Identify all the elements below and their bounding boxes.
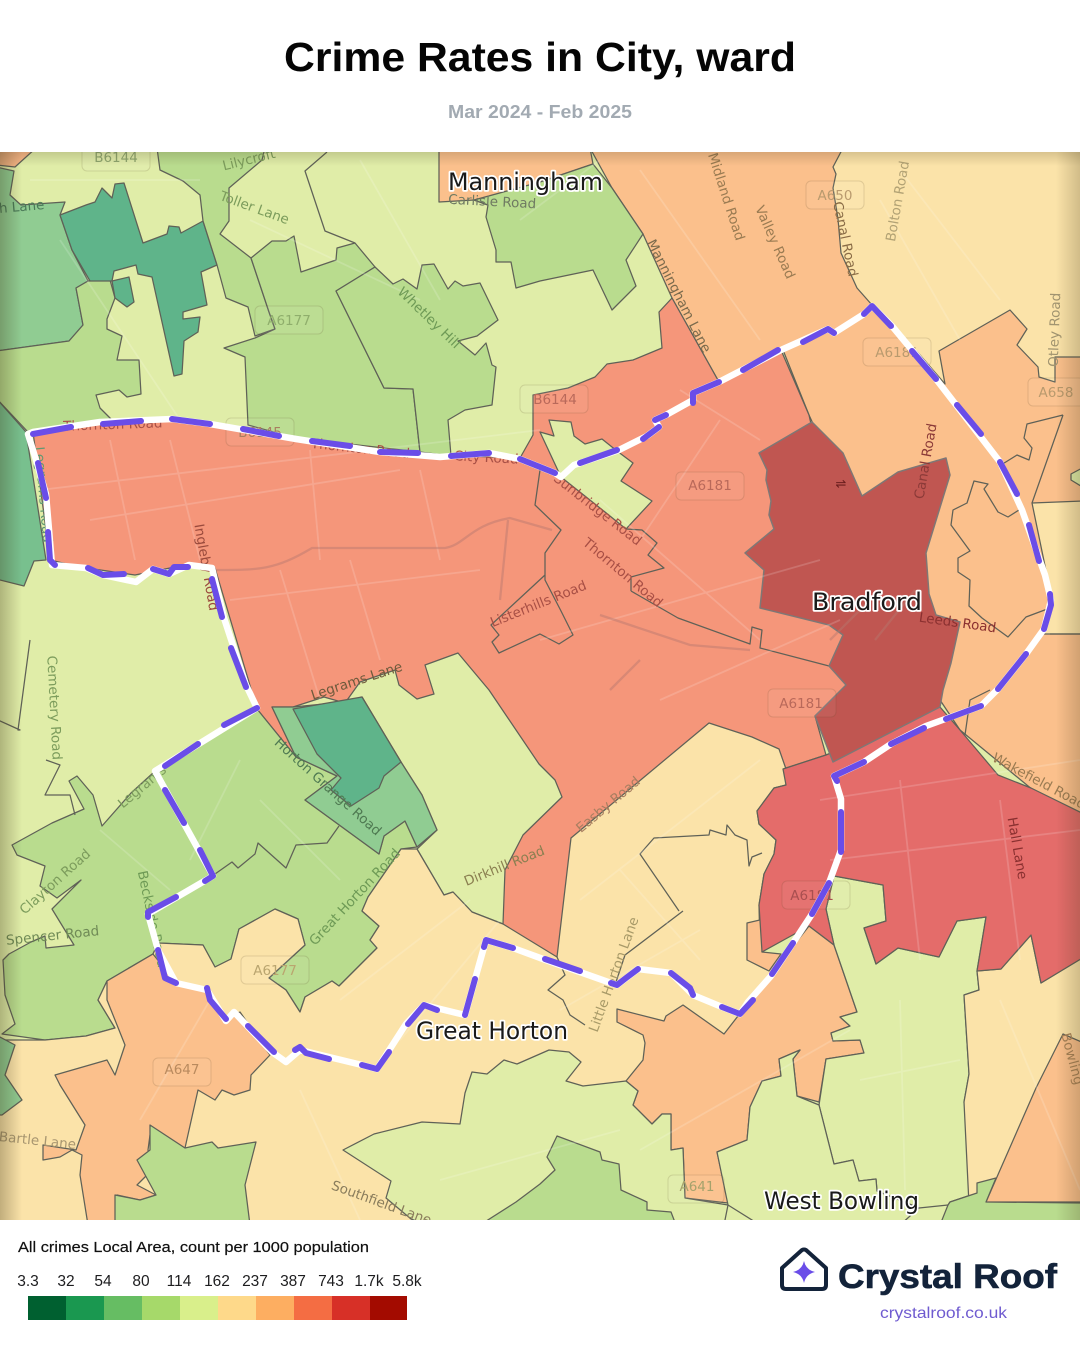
road name labels: Easby Road xyxy=(573,774,644,836)
road name labels: Bartle Lane xyxy=(0,1129,77,1153)
road name labels: Legrams Lane xyxy=(309,659,404,704)
legend scale values: 114 xyxy=(167,1273,192,1290)
yellow interior boundaries xyxy=(548,825,762,1025)
region: dark red Bradford centre xyxy=(745,422,960,762)
road name labels: Beckside Road xyxy=(134,869,170,969)
railway lines xyxy=(215,518,915,690)
road name labels: A650 xyxy=(817,188,853,204)
region: red Hall Lane xyxy=(757,707,1080,983)
road name labels: A647 xyxy=(164,1062,200,1078)
road name labels: Clayton Road xyxy=(17,846,94,918)
road name labels: Southfield Lane xyxy=(329,1178,434,1229)
road name labels: A6177 xyxy=(253,963,297,979)
region: south-east green xyxy=(940,1178,1080,1225)
region: central pale green xyxy=(345,653,562,924)
region: west green xyxy=(0,167,88,351)
road name labels: Little Horton Lane xyxy=(586,915,642,1034)
road name labels: Legrams xyxy=(115,762,170,812)
logo: Crystal Roof xyxy=(782,1250,1058,1322)
place label: West Bowling: West Bowling xyxy=(764,1187,919,1215)
region: salmon central area xyxy=(33,298,860,960)
region: south-east pale green xyxy=(819,876,986,1208)
salmon interior boundaries xyxy=(491,470,829,666)
road name labels: B6144 xyxy=(94,150,138,166)
region: south-west green lobe xyxy=(115,1125,256,1225)
region: top-left corner orange xyxy=(0,152,32,168)
region: south-centre green xyxy=(480,1136,676,1225)
road shields xyxy=(82,143,1080,1203)
outlines inside south-west green xyxy=(0,640,339,874)
place label: Great Horton: Great Horton xyxy=(416,1017,568,1045)
region: west light green xyxy=(0,280,141,432)
region: north-east orange xyxy=(590,148,1080,832)
region: south yellow xyxy=(0,723,800,1225)
region: Manningham green xyxy=(474,164,643,310)
road name labels: A6181 xyxy=(688,478,732,494)
road name labels: A6181 xyxy=(779,696,823,712)
region: south-centre pale green xyxy=(343,1050,728,1225)
legend scale values: 54 xyxy=(94,1273,112,1290)
road name labels: B6145 xyxy=(238,425,282,441)
title: Crime Rates in City, ward xyxy=(284,34,796,80)
east orange patch outline xyxy=(951,415,1080,735)
region: north green block xyxy=(224,236,420,452)
road name labels: A6181 xyxy=(875,345,919,361)
legend scale values: 32 xyxy=(57,1273,75,1290)
region: far west green xyxy=(0,398,46,586)
place label: Bradford: Bradford xyxy=(812,588,922,616)
road network texture xyxy=(30,160,1080,1220)
region: Whetley Hill green xyxy=(336,264,498,456)
legend scale values: 387 xyxy=(280,1273,306,1290)
road name labels: Carlisle Road xyxy=(448,192,537,212)
region: Manningham orange xyxy=(439,148,593,205)
region: south-east orange xyxy=(986,1034,1080,1202)
road name labels: A641 xyxy=(679,1179,715,1195)
website url: crystalroof.co.uk xyxy=(880,1305,1008,1322)
road name labels: Dirkhill Road xyxy=(462,843,547,890)
region: east yellow xyxy=(1032,501,1080,634)
place label: Manningham: Manningham xyxy=(448,168,603,196)
region: north-west dark green xyxy=(60,183,217,376)
road name labels: Toller Lane xyxy=(217,188,291,228)
legend scale values: 1.7k xyxy=(354,1273,384,1290)
icon: house with star xyxy=(782,1250,826,1289)
road name labels: Canal Road xyxy=(829,200,861,278)
road name labels: Sunbridge Road xyxy=(550,471,645,549)
road name labels: A658 xyxy=(1038,385,1074,401)
legend title: All crimes Local Area, count per 1000 population xyxy=(18,1239,369,1256)
road name labels: Bolton Road xyxy=(883,160,913,243)
road name labels: Midland Road xyxy=(704,151,748,243)
outline: pale neighbourhood boundaries xyxy=(305,152,355,243)
road name labels: Lilycroft xyxy=(221,146,277,174)
road name labels: Ingleby Road xyxy=(190,523,221,612)
road name labels: Horton Grange Road xyxy=(271,735,384,839)
region: west-edge green sliver xyxy=(0,1035,22,1115)
road name labels: Thornton Road xyxy=(309,436,411,462)
legend scale values: 3.3 xyxy=(17,1273,39,1290)
road name labels: A6181 xyxy=(790,888,834,904)
legend scale values: 80 xyxy=(132,1273,150,1290)
region: south-east yellow xyxy=(964,935,1080,1225)
road name labels: Cemetery Road xyxy=(43,655,65,760)
ward boundary purple dashes xyxy=(33,306,1051,1069)
road name labels: Thornton Road xyxy=(579,534,666,611)
road name labels: Leeds Road xyxy=(918,610,997,636)
legend scale values xyxy=(17,1273,422,1290)
road name labels: B6144 xyxy=(533,392,577,408)
road name labels: Whetley Hill xyxy=(394,284,464,352)
road name labels: Great Horton Road xyxy=(306,846,404,949)
road name labels: Hall Lane xyxy=(1004,816,1030,881)
region: pale patch on ward edge xyxy=(540,420,652,529)
legend scale values: 237 xyxy=(242,1273,268,1290)
subtitle: date range: Mar 2024 - Feb 2025 xyxy=(448,102,632,122)
road name labels: Listerhills Road xyxy=(488,578,589,631)
legend scale values: 5.8k xyxy=(392,1273,422,1290)
map edge vignette xyxy=(0,152,1080,1220)
ward boundary white line xyxy=(28,306,1051,1069)
road name labels: City Road xyxy=(454,448,519,468)
road name labels: Manningham Lane xyxy=(643,237,714,355)
region: Horton Grange dark green xyxy=(293,697,401,806)
logo wordmark: Crystal Roof xyxy=(838,1258,1058,1296)
region: Horton Grange mid green xyxy=(272,697,437,854)
legend xyxy=(17,1239,422,1320)
icon: railway station: ⇌ xyxy=(836,477,847,492)
road name labels: Otley Road xyxy=(1046,293,1064,367)
region: small orange beside red xyxy=(747,919,781,971)
road name labels: A6177 xyxy=(267,313,311,329)
region: south orange xyxy=(617,926,864,1203)
legend colour bar xyxy=(28,1296,407,1320)
road name labels: Canal Road xyxy=(912,422,941,500)
region: south-west green xyxy=(2,709,417,1040)
road name labels: Legrams Road xyxy=(31,446,55,543)
road name labels: Spencer Road xyxy=(5,923,100,949)
region: West Bowling pale xyxy=(717,1050,919,1225)
legend scale values: 162 xyxy=(204,1273,230,1290)
region: north-east yellow xyxy=(833,148,1080,384)
region: A647 orange xyxy=(43,954,270,1225)
road name labels: Thornton Road xyxy=(62,415,163,435)
region: north green strip xyxy=(157,148,275,336)
road name labels: Valley Road xyxy=(751,203,798,281)
legend scale values: 743 xyxy=(318,1273,344,1290)
